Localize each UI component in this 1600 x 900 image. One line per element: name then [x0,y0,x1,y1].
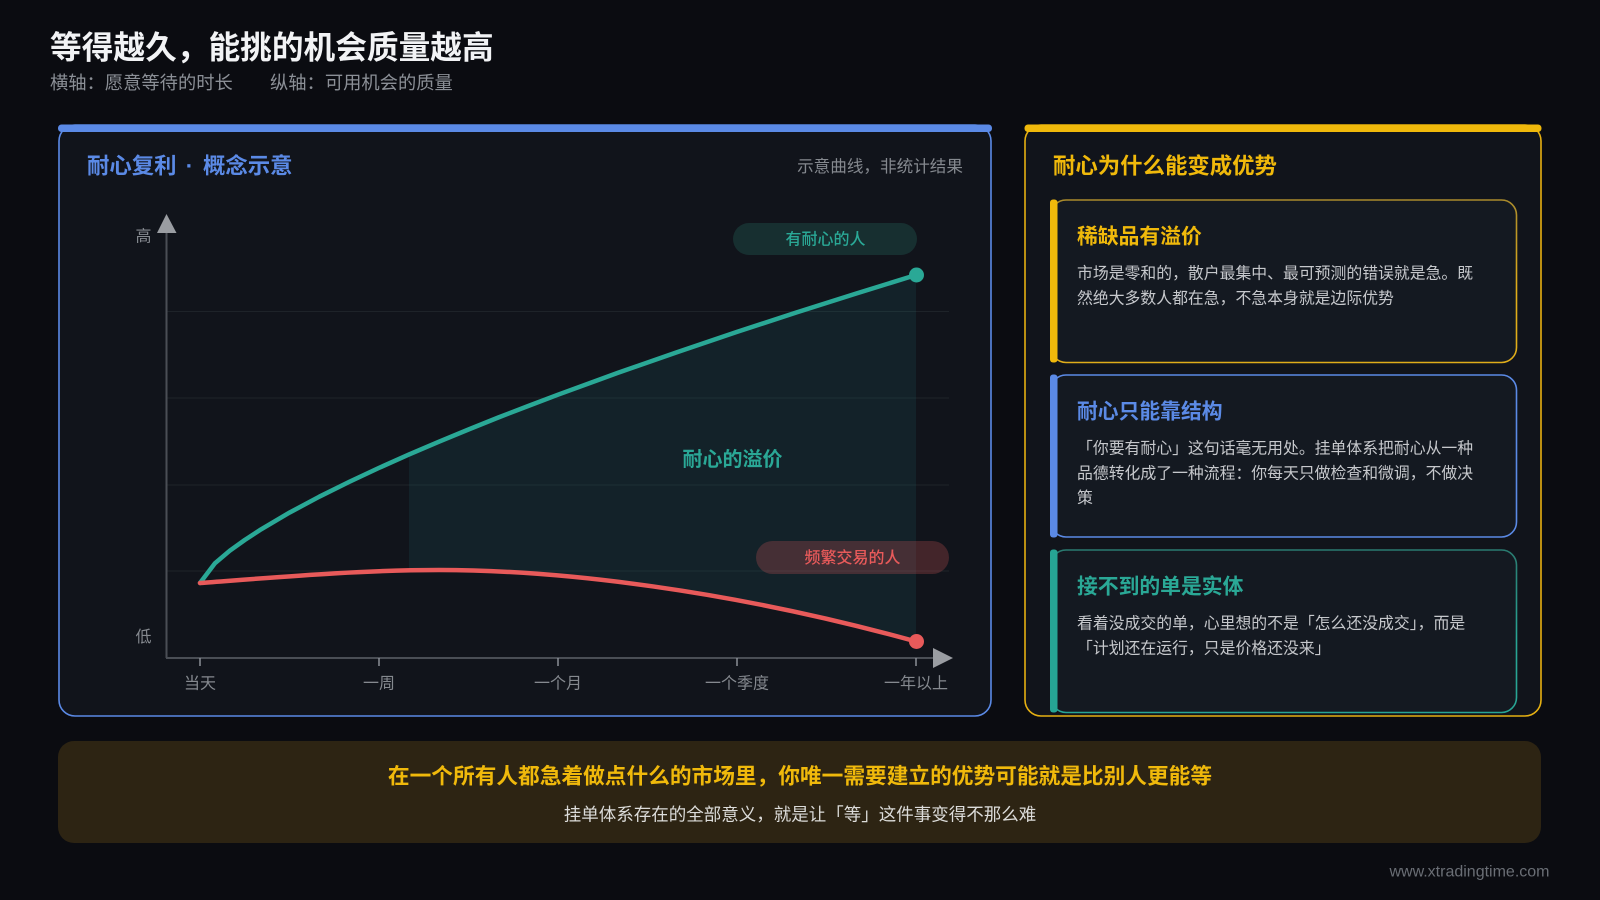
panel top accent bar [58,124,992,132]
subtitle: 横轴：愿意等待的时长 [50,72,233,93]
x axis labels: 一周 [363,676,395,692]
chart note: 示意曲线，非统计结果 [797,157,963,176]
x axis labels: 一年以上 [884,674,948,692]
panel heading: · [186,154,193,178]
panel heading: 概念示意 [203,152,293,178]
card: scarcity premium: 稀缺品有溢价 [1077,226,1202,248]
callout banner: 在一个所有人都急着做点什么的市场里，你唯一需要建立的优势可能就是比别人更能等 [388,764,1212,788]
title: 等得越久，能挑的机会质量越高 [50,30,494,66]
card: unfilled orders: 接不到的单是实体 [1077,574,1244,598]
card: scarcity premium: 市场是零和的，散户最集中、最可预测的错误就是急。既 [1077,264,1473,282]
card: scarcity premium [1050,200,1516,362]
callout banner [58,741,1541,843]
y axis labels [135,228,152,646]
y axis labels: 高 [135,228,152,246]
card: structure: 「你要有耐心」这句话毫无用处。挂单体系把耐心从一种 [1077,438,1473,458]
y axis labels: 低 [135,628,152,646]
label: frequent traders [756,541,949,574]
patient curve [200,275,916,583]
y axis [157,214,176,658]
card: structure: 耐心只能靠结构 [1077,400,1223,424]
x axis labels [184,674,948,692]
panel heading: 耐心为什么能变成优势 [1053,152,1277,178]
premium shaded area [409,275,916,642]
label: patient people: 有耐心的人 [785,230,866,248]
panel heading [87,152,293,178]
card: unfilled orders: 看着没成交的单，心里想的不是「怎么还没成交」，而是 [1077,614,1465,632]
card: unfilled orders [1050,550,1516,712]
panel top accent bar [1024,124,1542,132]
x axis labels: 一个月 [534,674,582,692]
panel: patience compounding chart [58,124,992,716]
label: frequent traders: 频繁交易的人 [804,548,901,567]
footer url: www.xtradingtime.com [1388,864,1550,880]
panel heading: 耐心复利 [87,154,177,178]
x axis [166,648,953,668]
frequent end dot [909,634,924,649]
callout banner: 挂单体系存在的全部意义，就是让「等」这件事变得不那么难 [564,804,1036,824]
subtitle: 纵轴：可用机会的质量 [270,72,453,93]
card: unfilled orders: 「计划还在运行，只是价格还没来」 [1077,640,1331,658]
x axis labels: 当天 [184,674,216,692]
chart: patience curves [135,214,953,692]
card: scarcity premium: 然绝大多数人都在急，不急本身就是边际优势 [1077,290,1394,308]
card: structure: 策 [1077,489,1093,507]
label: patience premium: 耐心的溢价 [682,448,782,471]
card: structure: 品德转化成了一种流程：你每天只做检查和微调，不做决 [1077,464,1473,482]
frequent trader curve [200,570,916,642]
card: structure [1050,374,1516,538]
label: patient people [733,223,917,255]
x axis labels: 一个季度 [705,674,769,692]
subtitle [50,72,453,93]
patient end dot [909,268,924,282]
panel: why patience is an edge [1024,124,1542,716]
